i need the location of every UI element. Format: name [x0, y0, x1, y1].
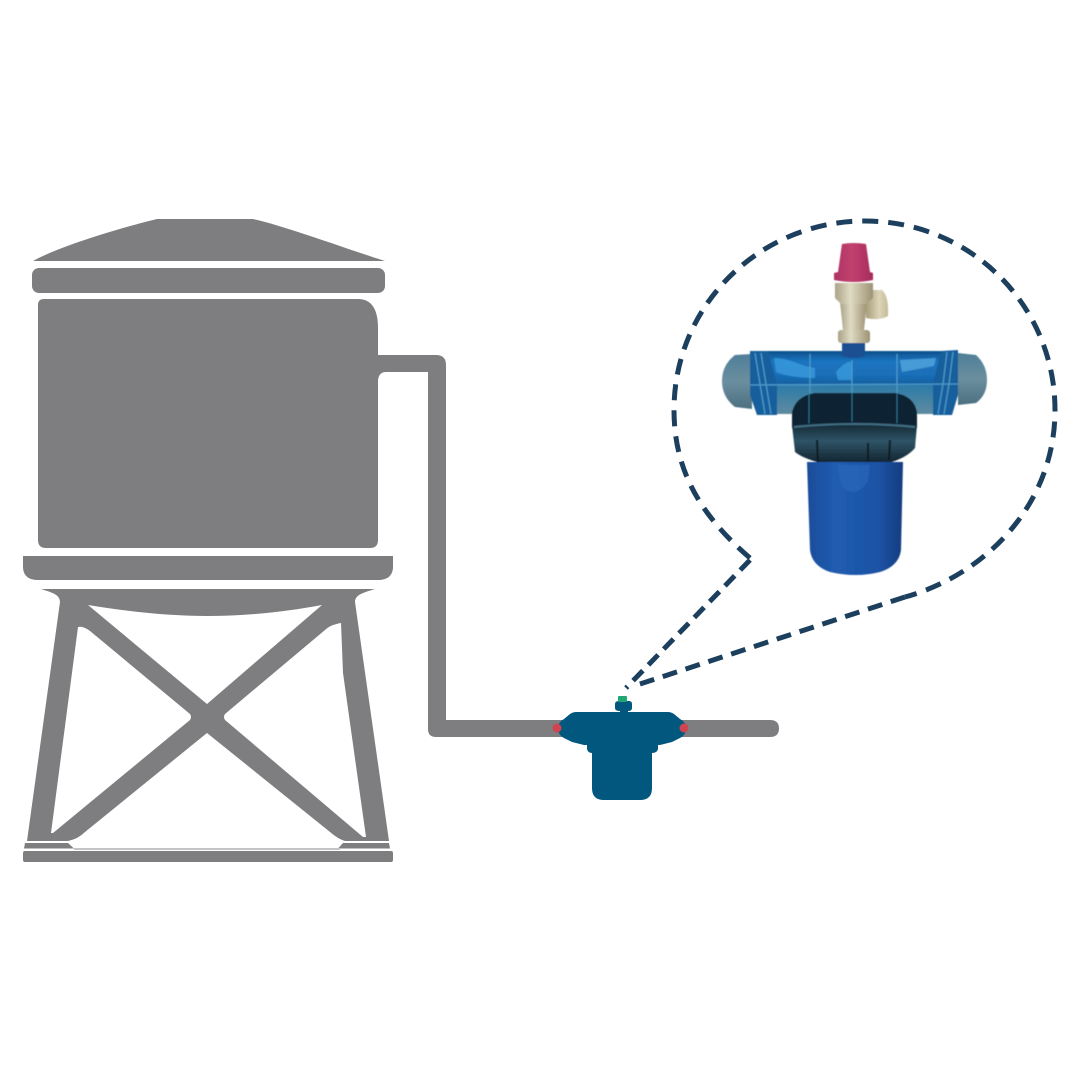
- filter body: [558, 712, 686, 800]
- base slab: [23, 851, 393, 862]
- left collar: [750, 351, 777, 415]
- valve stem: [842, 342, 865, 358]
- threaded right end: [958, 353, 987, 405]
- product photo: filter with valve: [722, 243, 987, 575]
- right collar: [933, 350, 958, 415]
- ring grips: [817, 440, 890, 464]
- screw ring: [792, 422, 917, 465]
- opening ribs: [809, 393, 897, 424]
- lower pipe: [760, 384, 950, 414]
- tail left: [626, 560, 750, 688]
- ring rim: [794, 424, 915, 427]
- tail right: [634, 597, 905, 686]
- valve tip: [618, 696, 627, 702]
- pipe highlights: [774, 358, 815, 378]
- threaded left end: [722, 354, 752, 409]
- left foot: [24, 843, 74, 848]
- tank rim: [32, 268, 385, 293]
- cup inner shape: [838, 465, 870, 492]
- filter stem and valve: [615, 701, 632, 713]
- dashed callout bubble: [626, 221, 1055, 688]
- brass head: [835, 283, 873, 304]
- right foot: [338, 843, 390, 848]
- filter icon on the pipe: [552, 696, 688, 800]
- brass nut: [838, 330, 870, 343]
- upper pipe: [750, 351, 958, 385]
- right seal: [680, 724, 688, 732]
- base line: [74, 848, 340, 850]
- tank roof: [33, 219, 385, 261]
- brass lower body: [840, 302, 867, 330]
- pipe ribs: [750, 352, 958, 414]
- tank stand: [27, 589, 389, 841]
- left seal: [552, 724, 562, 732]
- side port: [866, 290, 888, 319]
- bubble outline: [674, 221, 1055, 597]
- tank base plate: [23, 556, 393, 580]
- opening: [792, 393, 917, 428]
- filter cup: [807, 462, 903, 575]
- tank body: [38, 299, 378, 548]
- outlet pipe: [378, 355, 779, 737]
- pink relief cap: [834, 243, 873, 282]
- water tank: [23, 219, 393, 862]
